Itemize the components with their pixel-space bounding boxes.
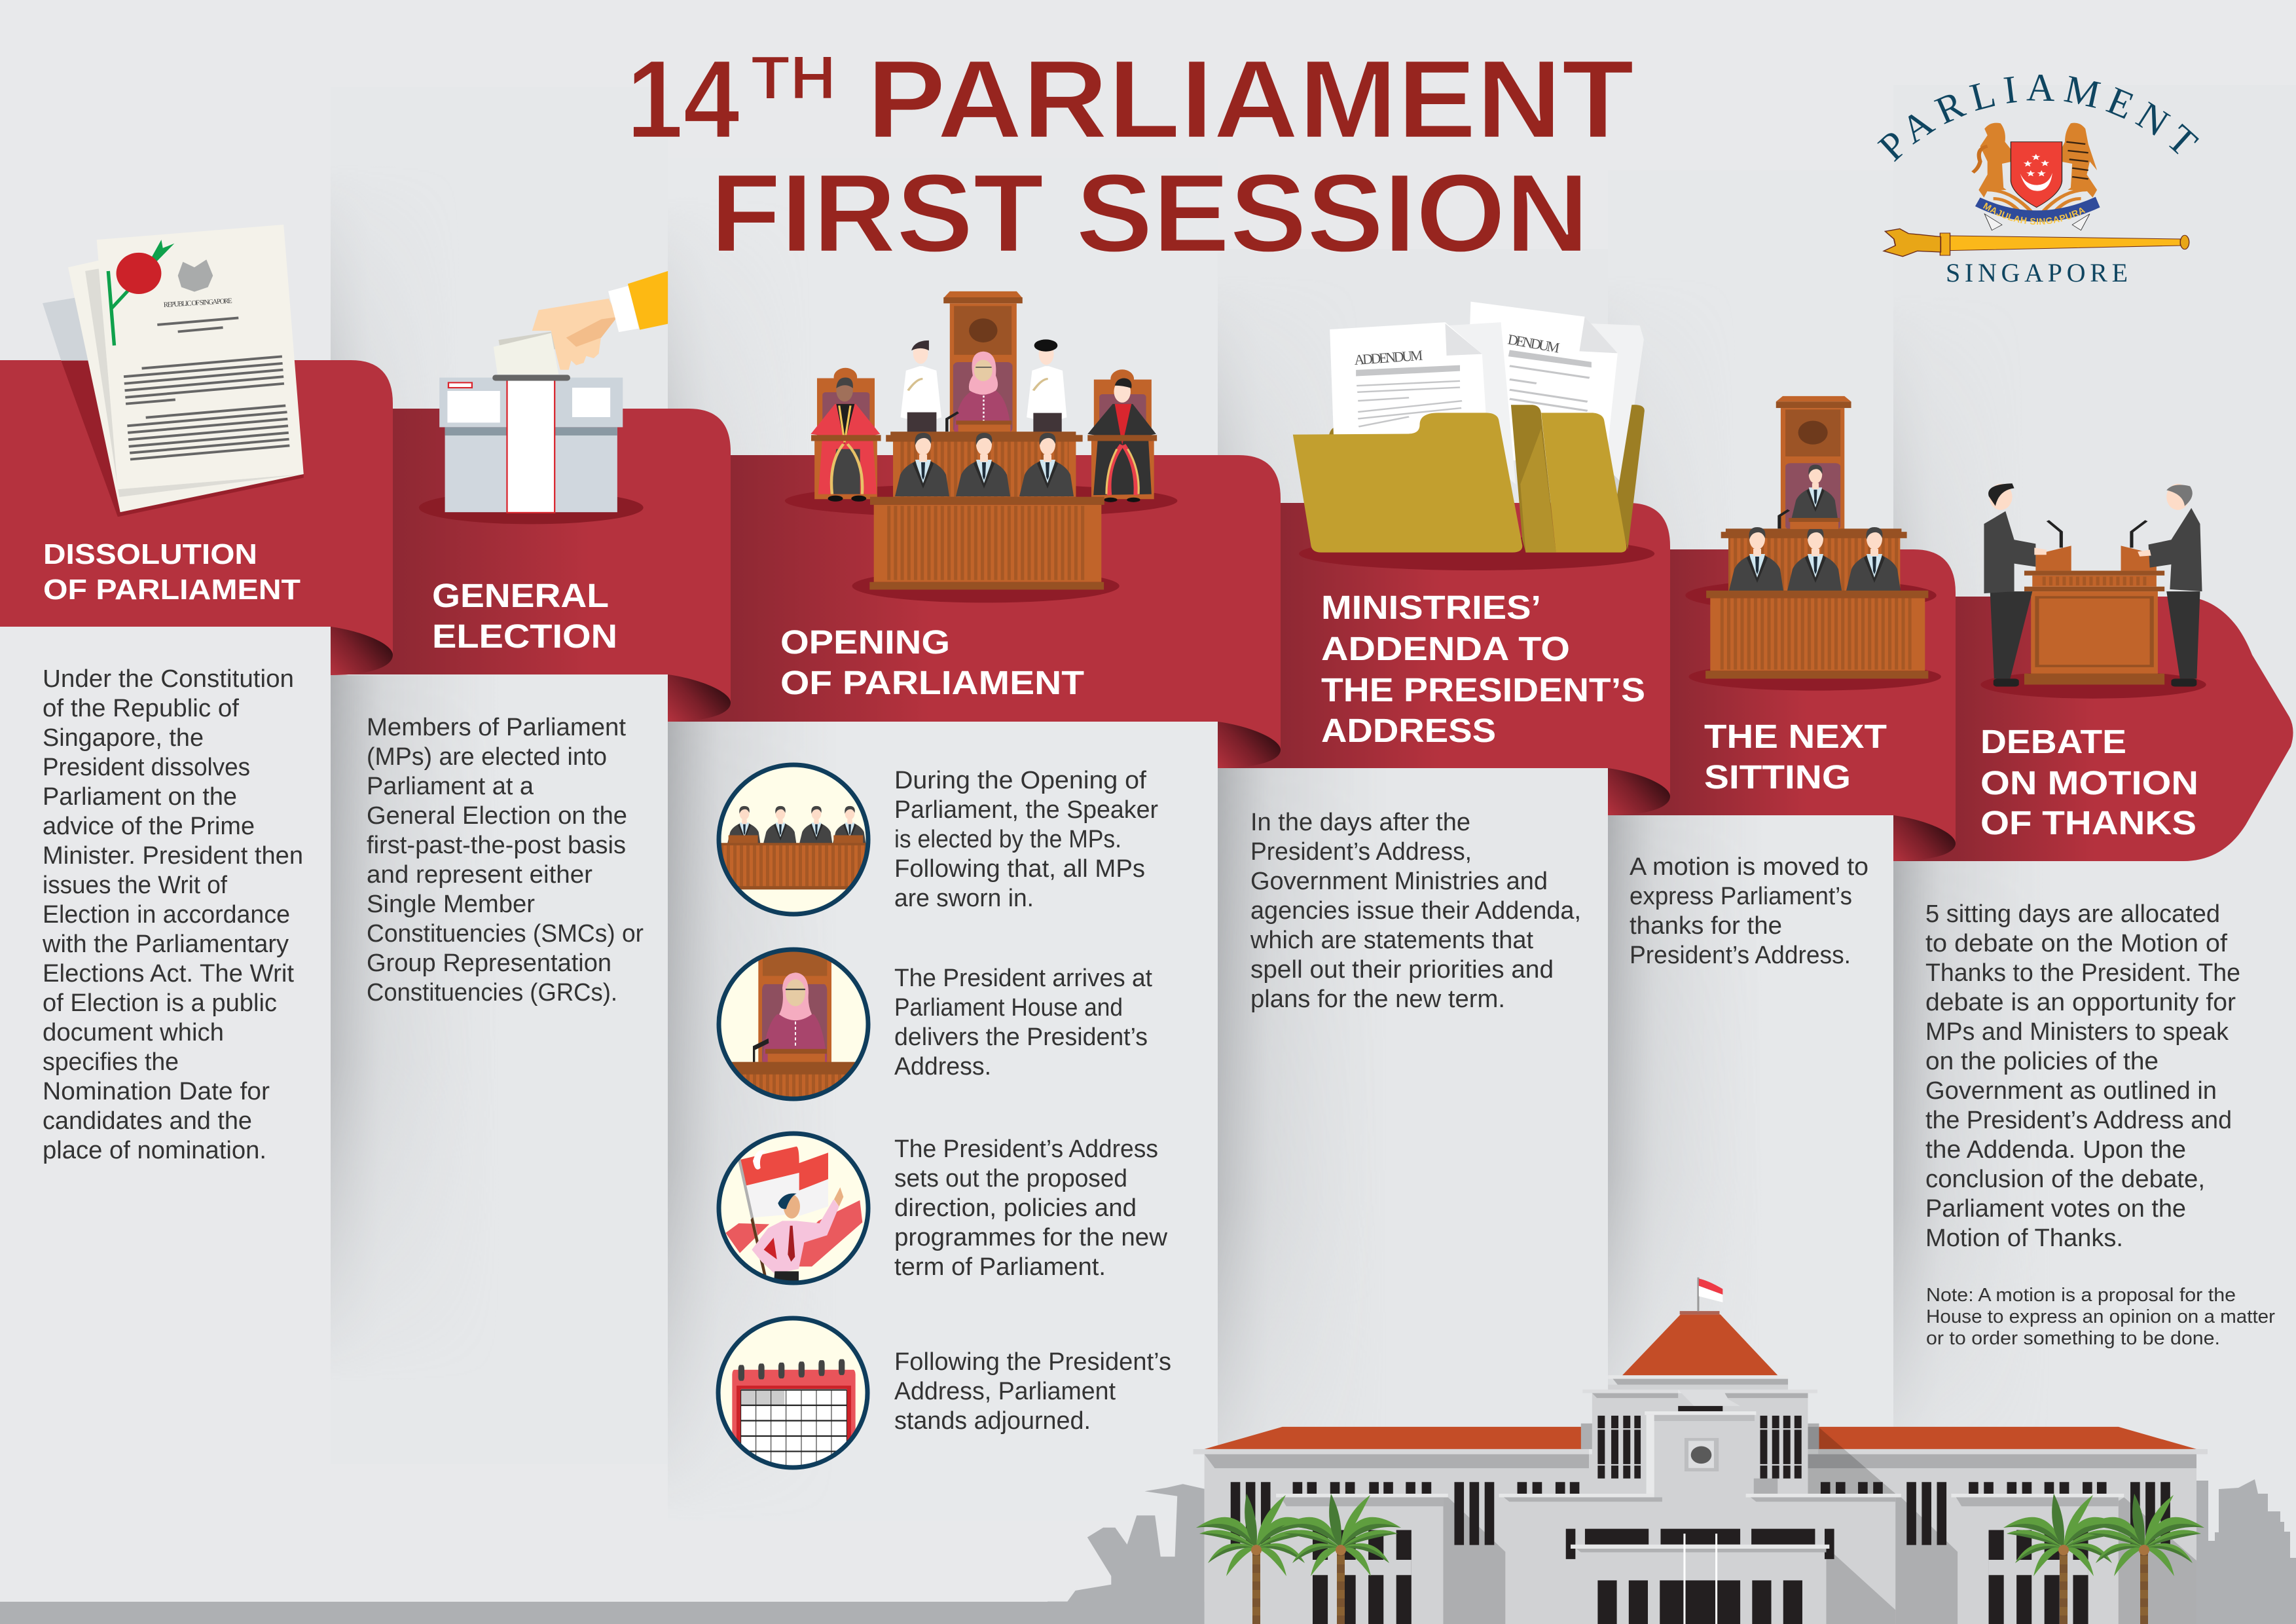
- heading: ministries addenda: ADDENDA TO: [1321, 630, 1570, 667]
- text: ministries addenda: [1250, 809, 1581, 1013]
- document header text: REPUBLIC OF SINGAPORE: [163, 297, 232, 309]
- text: ministries addenda: which are statements that: [1250, 927, 1533, 954]
- heading: ministries addenda: THE PRESIDENT’S: [1321, 671, 1645, 709]
- paper columns behind the ribbons: [331, 213, 2015, 1460]
- text: opening block 1: [894, 767, 1158, 912]
- illustration: Parliament House: [1194, 1278, 2208, 1624]
- text: debate on motion of thanks: [1925, 900, 2240, 1252]
- text: dissolution of parliament: Elections Act. The Writ: [43, 960, 294, 987]
- ribbon 2: [331, 409, 731, 722]
- text: opening block 2: delivers the President’s: [894, 1024, 1148, 1051]
- text: the next sitting: A motion is moved to: [1630, 853, 1868, 881]
- logo: Parliament of Singapore: [1877, 75, 2199, 287]
- text: general election: first-past-the-post basis: [367, 832, 626, 859]
- logo place name: SINGAPORE: [1946, 258, 2128, 287]
- text: dissolution of parliament: Election in accordance: [43, 901, 290, 929]
- president: [947, 352, 1011, 433]
- text: general election: [367, 714, 644, 1006]
- text: ministries addenda: In the days after the: [1250, 809, 1470, 836]
- text: dissolution of parliament: document which: [43, 1019, 224, 1046]
- text: debate on motion of thanks: to debate on the Motion of: [1925, 930, 2227, 957]
- text: opening block 2: [894, 965, 1152, 1080]
- text: debate on motion of thanks: the Addenda. Upon the: [1925, 1136, 2186, 1164]
- text: opening block 4: stands adjourned.: [894, 1407, 1091, 1435]
- heading: ministries addenda: ADDRESS: [1321, 712, 1496, 749]
- ribbon 5: [1608, 549, 1956, 861]
- heading: ministries addenda: [1321, 589, 1645, 749]
- note: [1926, 1285, 2275, 1349]
- logo wordmark: PARLIAMENT: [1877, 75, 2199, 162]
- text: ministries addenda: agencies issue their Addenda,: [1250, 897, 1581, 925]
- text: opening block 1: Following that, all MPs: [894, 855, 1145, 883]
- text: opening block 2: Address.: [894, 1053, 991, 1080]
- right chair and figure in black robe: [1087, 369, 1157, 502]
- text: general election: Members of Parliament: [367, 714, 626, 741]
- text: general election: Constituencies (GRCs).: [367, 979, 617, 1006]
- ribbon 4: [1218, 503, 1670, 815]
- text: dissolution of parliament: Singapore, the: [43, 724, 204, 752]
- icon: ballot box with hand: [419, 271, 668, 524]
- skyline and ground: [0, 1479, 2296, 1624]
- illustration: folder of addenda: [1293, 302, 1654, 570]
- ribbon 3: [668, 455, 1281, 768]
- text: the next sitting: President’s Address.: [1630, 942, 1851, 969]
- text: debate on motion of thanks: Motion of Thanks.: [1925, 1225, 2123, 1252]
- text: ministries addenda: Government Ministries and: [1250, 868, 1548, 895]
- heading: debate on motion of thanks: OF THANKS: [1980, 804, 2196, 841]
- text: dissolution of parliament: candidates and the: [43, 1107, 252, 1135]
- text: debate on motion of thanks: Thanks to the President. The: [1925, 959, 2240, 987]
- text: opening block 3: The President’s Address: [894, 1135, 1158, 1163]
- text: opening block 4: [894, 1348, 1171, 1435]
- heading: the next sitting: THE NEXT: [1704, 718, 1887, 755]
- note: House to express an opinion on a matter: [1926, 1306, 2275, 1327]
- text: dissolution of parliament: with the Parliamentary: [42, 931, 289, 958]
- heading: opening of parliament: [780, 623, 1084, 701]
- text: dissolution of parliament: advice of the Prime: [43, 813, 255, 840]
- text: opening block 1: are sworn in.: [894, 885, 1034, 912]
- text: general election: General Election on the: [367, 802, 627, 830]
- left chair and figure in red robe: [811, 368, 881, 502]
- text: dissolution of parliament: Under the Constitution: [43, 665, 294, 693]
- text: debate on motion of thanks: debate is an opportunity for: [1925, 989, 2236, 1016]
- title: [627, 37, 1634, 276]
- note: or to order something to be done.: [1926, 1328, 2220, 1349]
- text: debate on motion of thanks: Parliament votes on the: [1925, 1195, 2186, 1223]
- addendum labels: DENDUM: [1506, 331, 1561, 356]
- text: opening block 2: Parliament House and: [894, 994, 1123, 1022]
- text: dissolution of parliament: specifies the: [43, 1048, 179, 1076]
- icon: calendar: [716, 1316, 869, 1469]
- text: general election: Constituencies (SMCs) or: [367, 920, 644, 948]
- text: dissolution of parliament: issues the Writ of: [43, 872, 227, 899]
- icon: members swearing in: [719, 765, 868, 914]
- icon: writ of election document: [43, 225, 304, 517]
- ribbon 6: arrow head: [1893, 597, 2293, 861]
- heading: dissolution of parliament: [43, 538, 301, 606]
- speaker and members seated: [1729, 465, 1901, 591]
- heading: dissolution of parliament: DISSOLUTION: [43, 538, 257, 570]
- icon: man with national flag: [719, 1134, 868, 1285]
- palm trees: [1196, 1494, 2204, 1624]
- illustration: next sitting chamber: [1685, 396, 1941, 691]
- text: dissolution of parliament: Parliament on the: [43, 783, 237, 811]
- text: opening block 4: Following the President’s: [894, 1348, 1171, 1376]
- title: PARLIAMENT: [867, 37, 1634, 162]
- note: Note: A motion is a proposal for the: [1926, 1285, 2236, 1306]
- text: dissolution of parliament: President dissolves: [43, 754, 250, 781]
- coat of arms: [1973, 123, 2100, 231]
- ribbon 1: [0, 360, 393, 675]
- seated members of parliament: [895, 433, 1074, 496]
- text: general election: (MPs) are elected into: [367, 743, 607, 771]
- heading: opening of parliament: OPENING: [780, 623, 950, 661]
- text: debate on motion of thanks: MPs and Ministers to speak: [1925, 1018, 2229, 1046]
- text: debate on motion of thanks: on the policies of the: [1925, 1048, 2159, 1075]
- text: dissolution of parliament: place of nomination.: [43, 1137, 266, 1164]
- heading: debate on motion of thanks: DEBATE: [1980, 723, 2126, 760]
- heading: dissolution of parliament: OF PARLIAMENT: [43, 574, 301, 606]
- addendum labels: ADDENDUM: [1354, 347, 1423, 368]
- text: ministries addenda: spell out their priorities and: [1250, 956, 1554, 984]
- text: general election: Single Member: [367, 891, 535, 918]
- speaker chair: [943, 291, 1023, 434]
- text: debate on motion of thanks: Government as outlined in: [1925, 1077, 2217, 1105]
- title: 14: [627, 37, 740, 162]
- banner motto: MAJULAH SINGAPURA: [1983, 202, 2086, 225]
- illustration: debate lectern with two speakers: [1980, 483, 2206, 699]
- text: debate on motion of thanks: conclusion of the debate,: [1925, 1166, 2205, 1193]
- heading: the next sitting: [1704, 718, 1887, 796]
- text: debate on motion of thanks: 5 sitting days are allocated: [1925, 900, 2220, 928]
- heading: debate on motion of thanks: [1980, 723, 2198, 841]
- icon: president at lectern: [719, 948, 869, 1102]
- text: dissolution of parliament: of Election is a public: [43, 989, 277, 1017]
- text: the next sitting: [1630, 853, 1868, 969]
- text: opening block 1: is elected by the MPs.: [894, 826, 1121, 853]
- text: opening block 3: direction, policies and: [894, 1194, 1137, 1222]
- text: opening block 3: programmes for the new: [894, 1224, 1168, 1251]
- text: the next sitting: express Parliament’s: [1630, 883, 1852, 910]
- text: ministries addenda: plans for the new term.: [1250, 986, 1505, 1013]
- heading: the next sitting: SITTING: [1704, 758, 1851, 796]
- text: opening block 1: During the Opening of: [894, 767, 1146, 794]
- front desk: [869, 497, 1104, 590]
- text: opening block 1: Parliament, the Speaker: [894, 796, 1158, 824]
- text: opening block 3: [894, 1135, 1168, 1281]
- text: debate on motion of thanks: the President’s Address and: [1925, 1107, 2232, 1134]
- heading: ministries addenda: MINISTRIES’: [1321, 589, 1541, 626]
- title: FIRST SESSION: [710, 151, 1589, 276]
- middle bench: [886, 432, 1083, 498]
- next sitting lectern and desk: [1705, 510, 1928, 678]
- text: dissolution of parliament: Nomination Date for: [43, 1078, 270, 1105]
- text: opening block 2: The President arrives at: [894, 965, 1152, 992]
- heading: general election: [432, 577, 617, 655]
- text: general election: Parliament at a: [367, 773, 534, 800]
- title: TH: [751, 43, 836, 113]
- addendum labels: [1354, 331, 1561, 368]
- text: opening block 3: sets out the proposed: [894, 1165, 1127, 1192]
- illustration: Opening of Parliament chamber: [785, 291, 1177, 602]
- text: opening block 4: Address, Parliament: [894, 1378, 1116, 1405]
- text: general election: Group Representation: [367, 950, 611, 977]
- heading: general election: ELECTION: [432, 618, 617, 655]
- text: dissolution of parliament: Minister. President then: [43, 842, 303, 870]
- text: ministries addenda: President’s Address,: [1250, 838, 1472, 866]
- text: opening block 3: term of Parliament.: [894, 1253, 1106, 1281]
- heading: opening of parliament: OF PARLIAMENT: [780, 664, 1084, 701]
- text: dissolution of parliament: of the Republic of: [43, 695, 239, 722]
- mace: [1884, 229, 2189, 257]
- text: dissolution of parliament: [42, 665, 303, 1164]
- text: the next sitting: thanks for the: [1630, 912, 1782, 940]
- officers: [901, 339, 1066, 432]
- text: general election: and represent either: [367, 861, 592, 889]
- heading: general election: GENERAL: [432, 577, 609, 614]
- heading: debate on motion of thanks: ON MOTION: [1980, 764, 2198, 802]
